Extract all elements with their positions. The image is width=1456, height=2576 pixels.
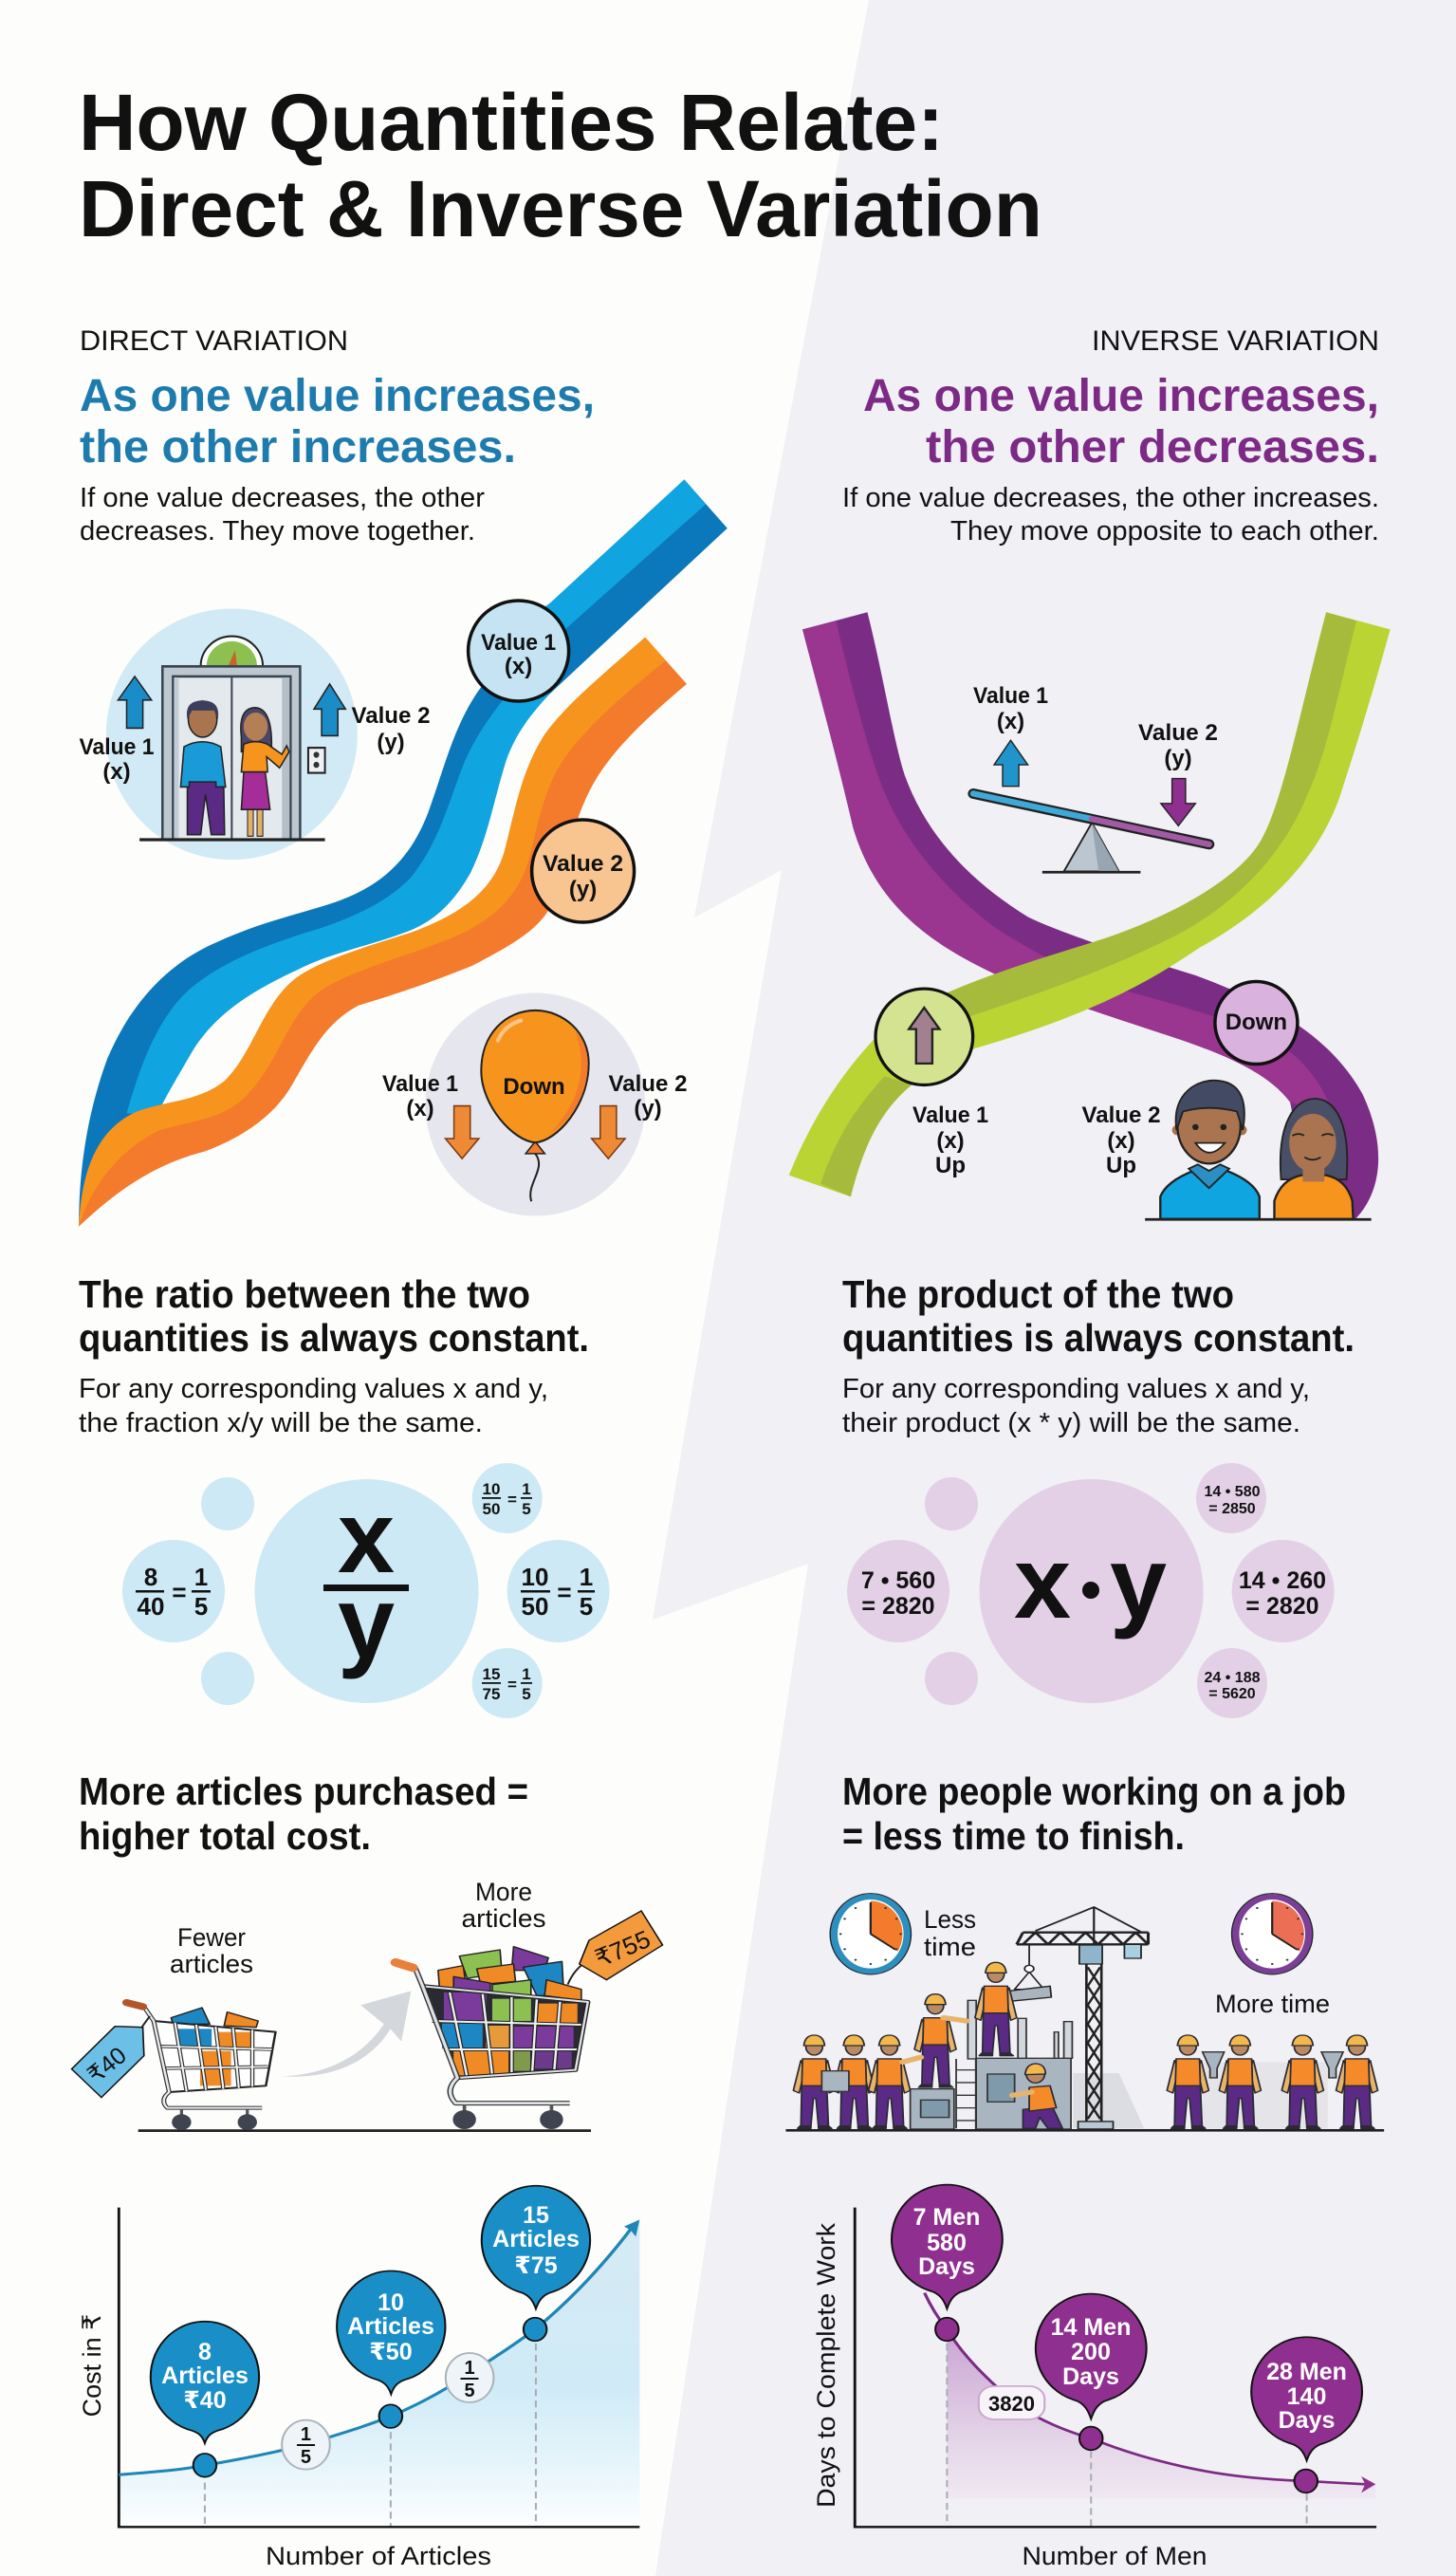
seesaw <box>973 740 1209 872</box>
ratio pill one: 5 <box>301 2447 311 2468</box>
fraction 10/50 = 1/5 <box>521 1563 595 1621</box>
balloon vignette: (x) <box>406 1096 434 1121</box>
value 2 circle: (y) <box>569 877 597 902</box>
callout 8 articles: Articles <box>161 2363 249 2389</box>
fraction 10/50 = 1/5: 5 <box>580 1592 593 1621</box>
x over y formula <box>323 1479 409 1679</box>
product 14 x 580 <box>1205 1484 1261 1517</box>
callout 28 men: 28 Men <box>1266 2359 1347 2385</box>
product statement <box>842 1272 1355 1438</box>
callout 15 articles: 15 <box>523 2202 549 2229</box>
less time label: time <box>924 1933 976 1961</box>
inverse description: They move opposite to each other. <box>950 516 1379 547</box>
callout 14 men: Days <box>1062 2363 1119 2390</box>
job heading: More people working on a job <box>842 1770 1346 1813</box>
less time clock <box>830 1894 912 1974</box>
product 14 x 260: 14 • 260 <box>1239 1567 1326 1594</box>
product 24 x 188 <box>1205 1670 1261 1702</box>
right background panel <box>653 0 1456 2576</box>
fraction 10/50 = 1/5: 1 <box>580 1563 593 1591</box>
x axis label: Number of Articles <box>266 2542 491 2570</box>
product statement: quantities is always constant. <box>842 1316 1355 1360</box>
title <box>79 78 1042 253</box>
value 2 circle <box>532 820 635 922</box>
balloon vignette: (y) <box>634 1096 662 1121</box>
ratio bubble diagram <box>122 1463 610 1718</box>
x over y formula: y <box>338 1565 395 1679</box>
blue and orange ribbons <box>79 479 728 1227</box>
chart: days vs men <box>812 2185 1376 2570</box>
callout 15 articles: Articles <box>492 2226 580 2252</box>
callout 15 articles: ₹75 <box>514 2252 558 2279</box>
ratio statement: quantities is always constant. <box>79 1316 589 1360</box>
price tag 755: ₹755 <box>591 1924 654 1973</box>
direct description: decreases. They move together. <box>80 516 475 547</box>
small fraction 10/50 = 1/5: 5 <box>522 1500 531 1518</box>
callout 28 men <box>1266 2359 1347 2434</box>
inverse headline: the other decreases. <box>926 422 1379 473</box>
fewer articles label: Fewer <box>177 1923 246 1952</box>
small fraction 10/50 = 1/5: = <box>507 1491 517 1509</box>
fewer articles label <box>170 1923 253 1978</box>
value 2 circle: Value 2 <box>543 851 623 877</box>
elevator vignette: (x) <box>102 759 131 785</box>
ratio pill one: 1 <box>301 2424 311 2445</box>
product 14 x 260 <box>1239 1567 1326 1620</box>
inverse headline: As one value increases, <box>863 371 1379 421</box>
building blocks <box>911 2000 1072 2129</box>
product 14 x 580: = 2850 <box>1208 1501 1256 1517</box>
title: Direct & Inverse Variation <box>79 164 1042 253</box>
panel: direct variation intro <box>80 325 595 547</box>
inverse kicker: INVERSE VARIATION <box>1092 325 1379 357</box>
inverse description: If one value decreases, the other increases. <box>842 483 1379 513</box>
direct headline: As one value increases, <box>80 371 595 421</box>
x dot y formula <box>1014 1525 1167 1640</box>
callout 15 articles <box>492 2202 580 2279</box>
balloon vignette <box>382 992 687 1216</box>
chart plot <box>119 2186 639 2527</box>
seesaw labels: Value 1 <box>973 683 1048 709</box>
more articles label: articles <box>461 1904 546 1933</box>
more articles label: More <box>475 1878 532 1906</box>
callout 8 articles: 8 <box>198 2339 212 2365</box>
callout 7 men <box>913 2204 980 2280</box>
product bubble diagram <box>847 1463 1335 1718</box>
direct headline: the other increases. <box>80 422 516 473</box>
product 14 x 580: 14 • 580 <box>1205 1484 1261 1500</box>
x dot y formula: y <box>1110 1525 1167 1640</box>
cost heading <box>79 1770 528 1858</box>
seesaw labels: (x) <box>997 709 1024 734</box>
y axis label: Cost in ₹ <box>78 2314 106 2417</box>
price tag 40: ₹40 <box>83 2042 132 2088</box>
direct description: If one value decreases, the other <box>80 483 485 513</box>
callout 7 men: 7 Men <box>913 2204 980 2231</box>
x axis label: Number of Men <box>1023 2542 1207 2570</box>
seesaw labels: (y) <box>1164 746 1192 771</box>
elevator vignette <box>80 608 431 860</box>
callout 8 articles <box>161 2339 249 2414</box>
inverse headline <box>863 371 1379 473</box>
value 1 circle <box>469 601 569 701</box>
product 14 x 260: = 2820 <box>1245 1593 1319 1620</box>
product pill: 3820 <box>988 2392 1035 2416</box>
bottom labels <box>912 1103 1161 1178</box>
purple ribbon <box>802 612 1378 1219</box>
fraction 8/40 = 1/5: 8 <box>144 1563 157 1591</box>
construction illustration <box>785 1894 1384 2130</box>
fraction 10/50 = 1/5: 50 <box>522 1592 548 1621</box>
product 24 x 188: = 5620 <box>1208 1686 1256 1702</box>
small fraction 15/75 = 1/5: 5 <box>522 1685 531 1703</box>
elevator vignette: (y) <box>377 730 405 755</box>
ratio statement: The ratio between the two <box>79 1272 530 1316</box>
ratio statement <box>79 1272 589 1438</box>
small fraction 10/50 = 1/5: 50 <box>483 1500 500 1518</box>
small fraction 10/50 = 1/5: 1 <box>522 1480 531 1498</box>
panel: inverse ribbons illustration <box>789 612 1391 1219</box>
down circle <box>1215 981 1298 1065</box>
small fraction 15/75 = 1/5: = <box>507 1676 517 1694</box>
small fraction 15/75 = 1/5: 75 <box>483 1685 500 1703</box>
callout 10 articles: 10 <box>378 2289 404 2316</box>
x over y formula: x <box>338 1479 395 1594</box>
ratio pill two <box>461 2358 478 2401</box>
callout 8 articles: ₹40 <box>183 2387 227 2414</box>
direct kicker: DIRECT VARIATION <box>80 325 348 357</box>
fraction 8/40 = 1/5: = <box>172 1578 187 1606</box>
job heading: = less time to finish. <box>842 1814 1185 1858</box>
x dot y formula: x <box>1014 1525 1071 1640</box>
fraction 8/40 = 1/5: 40 <box>138 1592 164 1621</box>
bottom labels: Value 1 <box>912 1103 988 1128</box>
fewer articles label: articles <box>170 1950 253 1978</box>
chart plot <box>855 2185 1376 2527</box>
callout 10 articles: Articles <box>347 2313 434 2340</box>
shopping carts illustration <box>72 1878 663 2131</box>
callout 7 men: 580 <box>927 2230 967 2256</box>
small fraction 15/75 = 1/5: 1 <box>522 1665 531 1683</box>
seesaw labels <box>973 683 1218 771</box>
callout 10 articles: ₹50 <box>369 2339 413 2365</box>
small fraction 15/75 = 1/5 <box>482 1665 532 1703</box>
direct headline <box>80 371 595 473</box>
more time label: More time <box>1215 1990 1330 2018</box>
value 1 circle: (x) <box>505 654 532 679</box>
callout 14 men: 200 <box>1071 2339 1111 2365</box>
elevator vignette: Value 1 <box>80 734 154 760</box>
balloon vignette: Value 2 <box>609 1071 687 1097</box>
small fraction 10/50 = 1/5 <box>482 1480 532 1518</box>
crane <box>1009 1907 1148 2129</box>
fraction 10/50 = 1/5: 10 <box>522 1563 548 1591</box>
fraction 10/50 = 1/5: = <box>557 1578 572 1606</box>
chart: cost vs articles <box>78 2186 639 2570</box>
more time clock <box>1232 1894 1313 1974</box>
fraction 8/40 = 1/5: 5 <box>194 1592 208 1621</box>
fraction 8/40 = 1/5: 1 <box>194 1563 208 1591</box>
product statement: For any corresponding values x and y, <box>842 1374 1310 1404</box>
product 7 x 560: = 2820 <box>861 1593 935 1620</box>
cost heading: higher total cost. <box>79 1814 371 1858</box>
green ribbon <box>789 612 1391 1196</box>
balloon vignette: Value 1 <box>382 1071 458 1097</box>
inverse description <box>842 483 1379 547</box>
callout 28 men: Days <box>1279 2407 1335 2434</box>
people: boy and girl <box>1145 1081 1372 1219</box>
elevator vignette: Value 2 <box>351 703 431 729</box>
bottom labels: Up <box>935 1153 966 1178</box>
callout 10 articles <box>347 2289 434 2365</box>
direct description <box>80 483 485 547</box>
balloon vignette: Down <box>503 1074 565 1100</box>
y axis label: Days to Complete Work <box>812 2222 840 2508</box>
less time label <box>924 1905 976 1961</box>
bottom labels: Up <box>1106 1153 1136 1178</box>
up arrow circle <box>875 989 973 1084</box>
bottom labels: Value 2 <box>1081 1103 1161 1128</box>
product statement: their product (x * y) will be the same. <box>842 1408 1300 1438</box>
ratio pill two: 1 <box>464 2358 475 2379</box>
product 7 x 560: 7 • 560 <box>861 1567 935 1594</box>
big cart <box>396 1947 588 2129</box>
panel: inverse variation intro <box>842 325 1379 547</box>
ratio bubbles <box>122 1463 610 1718</box>
title: How Quantities Relate: <box>79 78 944 167</box>
ratio pill two: 5 <box>464 2381 475 2401</box>
less time label: Less <box>924 1905 976 1934</box>
bottom labels: (x) <box>936 1128 965 1154</box>
ratio pill one <box>297 2424 315 2468</box>
product bubbles <box>847 1463 1335 1718</box>
job heading <box>842 1770 1346 1858</box>
ratio statement: For any corresponding values x and y, <box>79 1374 548 1404</box>
down circle: Down <box>1226 1010 1287 1035</box>
small cart <box>126 2003 276 2130</box>
callout 14 men: 14 Men <box>1051 2314 1131 2341</box>
small fraction 15/75 = 1/5: 15 <box>483 1665 500 1683</box>
callout 28 men: 140 <box>1287 2383 1326 2410</box>
product 7 x 560 <box>861 1567 935 1620</box>
callout 14 men <box>1051 2314 1131 2390</box>
callout 7 men: Days <box>918 2253 975 2280</box>
more articles label <box>461 1878 546 1933</box>
bottom labels: (x) <box>1107 1128 1135 1154</box>
ratio statement: the fraction x/y will be the same. <box>79 1408 483 1438</box>
fraction 8/40 = 1/5 <box>136 1563 211 1621</box>
product 24 x 188: 24 • 188 <box>1205 1670 1261 1686</box>
seesaw labels: Value 2 <box>1138 720 1218 746</box>
cost heading: More articles purchased = <box>79 1770 528 1813</box>
panel: direct ribbons illustration <box>79 479 728 1227</box>
value 1 circle: Value 1 <box>481 630 556 656</box>
product statement: The product of the two <box>842 1272 1234 1316</box>
small fraction 10/50 = 1/5: 10 <box>483 1480 500 1498</box>
workers <box>793 1962 1378 2128</box>
